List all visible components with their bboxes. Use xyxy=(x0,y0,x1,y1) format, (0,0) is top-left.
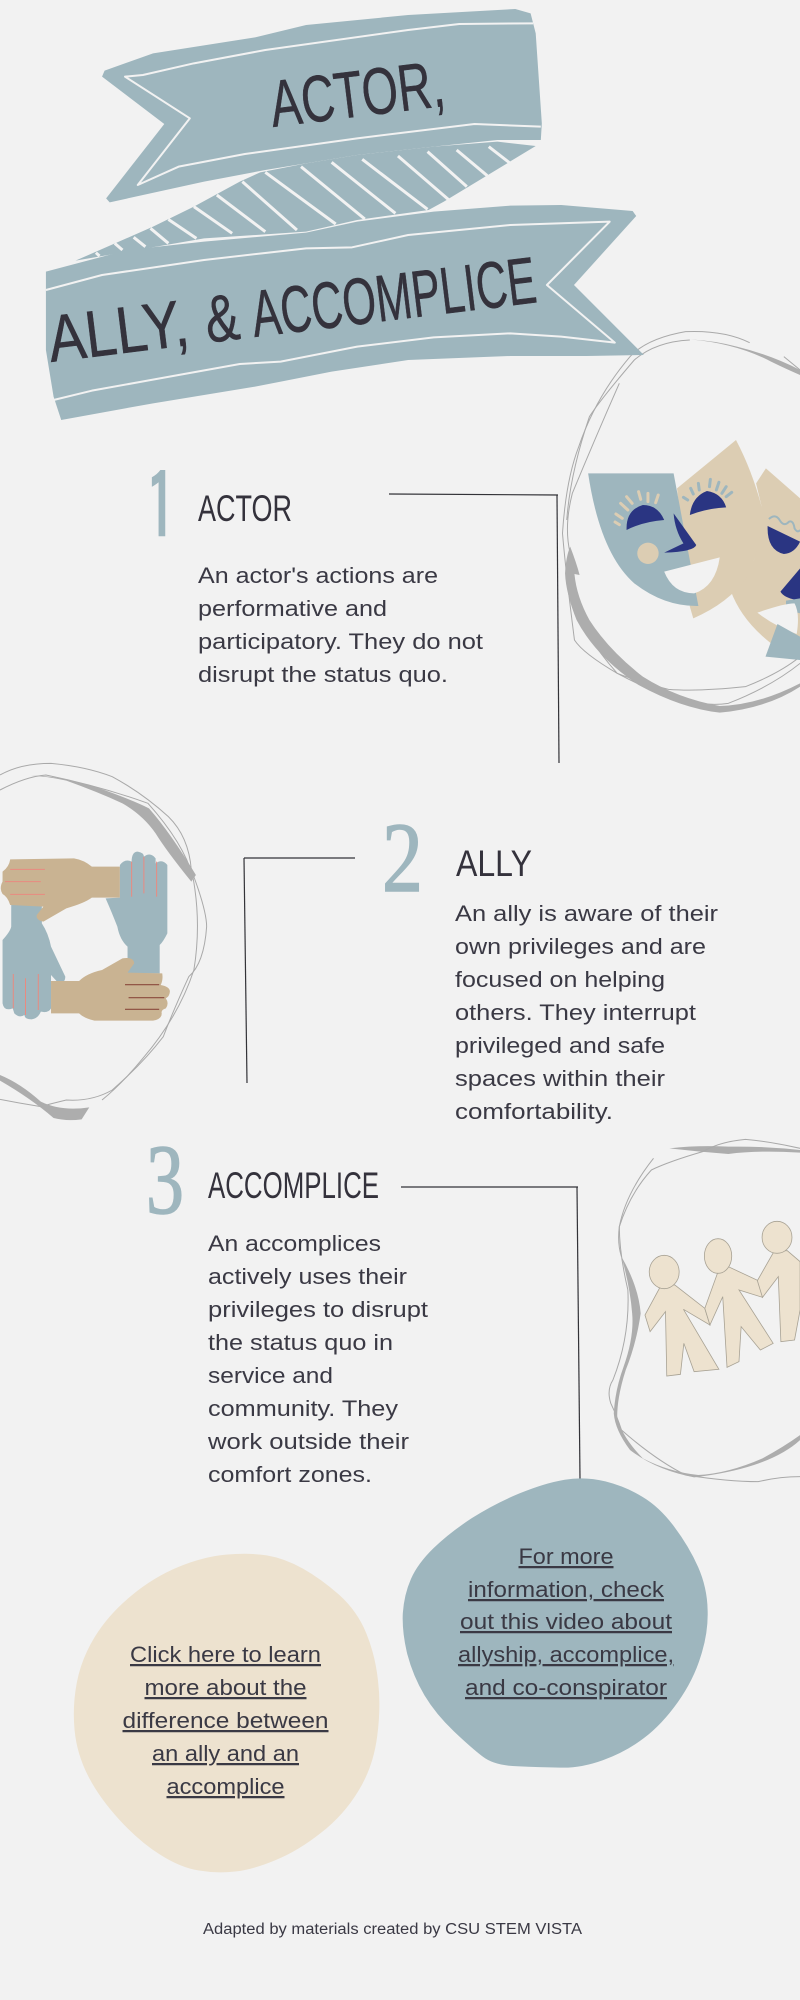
text block: accomplice definition: community. They xyxy=(208,1396,399,1421)
text block: actor definition: An actor's actions are xyxy=(198,563,438,588)
heading: ally: ALLY xyxy=(456,843,532,884)
text block: actor definition xyxy=(198,563,484,687)
blob shape: cream xyxy=(74,1554,379,1872)
blob shape: teal xyxy=(403,1478,708,1768)
title: ACTOR,: ACTOR, xyxy=(266,46,448,141)
title banner: top ribbon xyxy=(102,9,542,202)
link text: video: out this video about xyxy=(460,1609,673,1634)
text block: accomplice definition: comfort zones. xyxy=(208,1462,372,1487)
text block: accomplice definition: the status quo in xyxy=(208,1330,393,1355)
icon: four linked hands xyxy=(1,852,170,1021)
icon: scribbled circle around theatre masks xyxy=(562,331,800,713)
link text: video xyxy=(458,1544,674,1700)
link text: video: allyship, accomplice, xyxy=(458,1642,674,1667)
link text: video: information, check xyxy=(468,1577,665,1602)
number 2: 2 xyxy=(382,802,423,913)
footer credit: Adapted by materials created by CSU STEM VISTA xyxy=(203,1921,583,1938)
text block: ally definition: others. They interrupt xyxy=(455,1000,697,1025)
title: ALLY, & ACCOMPLICE: ACCOMPLICE xyxy=(247,243,540,351)
title banner: ribbon folded stripes xyxy=(76,142,536,261)
text block: ally definition: spaces within their xyxy=(455,1066,666,1091)
title banner: bottom ribbon xyxy=(46,205,644,420)
icon: scribbled circle around hands xyxy=(0,763,207,1120)
text block: accomplice definition: service and xyxy=(208,1363,333,1388)
title: ALLY, & ACCOMPLICE xyxy=(44,243,540,376)
text block: accomplice definition xyxy=(207,1231,429,1487)
text block: ally definition: privileged and safe xyxy=(455,1033,665,1058)
link text: video: For more xyxy=(518,1544,614,1569)
heading: accomplice: ACCOMPLICE xyxy=(208,1165,379,1206)
icon: scribbled circle around paper people xyxy=(609,1139,800,1482)
text block: accomplice definition: work outside their xyxy=(207,1429,410,1454)
number 1: 1 xyxy=(145,460,177,552)
icon: paper people chain xyxy=(645,1221,800,1376)
text block: accomplice definition: actively uses their xyxy=(208,1264,408,1289)
text block: actor definition: participatory. They do not xyxy=(198,629,484,654)
text block: ally definition: own privileges and are xyxy=(455,934,706,959)
text block: actor definition: performative and xyxy=(198,596,387,621)
link text: difference: difference between xyxy=(122,1708,328,1733)
connector: ally xyxy=(244,858,355,1083)
panel: video link blob xyxy=(403,1478,708,1768)
text block: ally definition: focused on helping xyxy=(455,967,665,992)
connector: accomplice xyxy=(401,1187,580,1479)
title: ALLY, & ACCOMPLICE: ALLY, xyxy=(44,285,193,376)
text block: ally definition xyxy=(455,901,719,1124)
icon: theatre masks xyxy=(588,440,800,660)
text block: ally definition: comfortability. xyxy=(455,1099,613,1124)
text block: ally definition: An ally is aware of their xyxy=(455,901,719,926)
link text: difference: an ally and an xyxy=(152,1741,299,1766)
number 3: 3 xyxy=(146,1124,184,1235)
link text: video: and co-conspirator xyxy=(465,1675,668,1700)
text block: accomplice definition: An accomplices xyxy=(208,1231,381,1256)
link text: difference: accomplice xyxy=(166,1774,284,1799)
link text: difference xyxy=(122,1642,328,1799)
link text: difference: more about the xyxy=(144,1675,306,1700)
heading: actor: ACTOR xyxy=(198,488,292,529)
link text: difference: Click here to learn xyxy=(130,1642,321,1667)
text block: actor definition: disrupt the status quo. xyxy=(198,662,448,687)
title: ALLY, & ACCOMPLICE: & xyxy=(201,279,243,357)
connector: actor xyxy=(389,494,559,763)
text block: accomplice definition: privileges to disrupt xyxy=(208,1297,429,1322)
panel: difference link blob xyxy=(74,1554,379,1872)
